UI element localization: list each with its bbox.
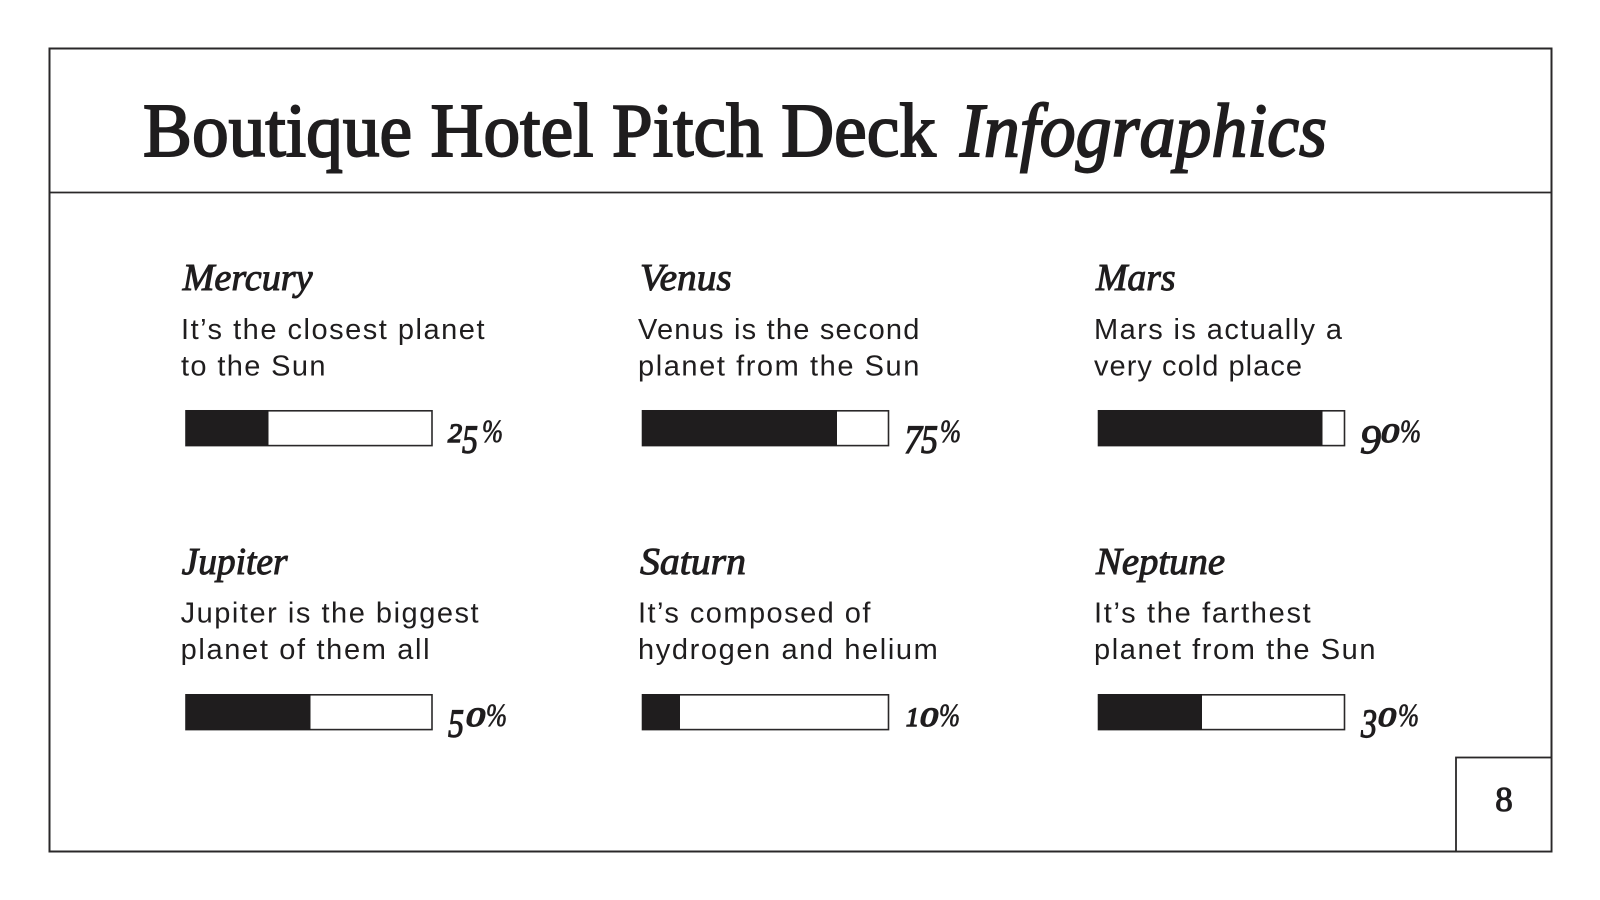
panel: Jupiter: planet of them all [181, 634, 430, 666]
panel: Jupiter: % [486, 698, 507, 734]
panel: Mars: 9 [1360, 417, 1381, 462]
panel: Venus: Venus is the second [638, 314, 919, 346]
panel: Mars [1094, 257, 1421, 462]
panel: Neptune: 0 [1378, 703, 1396, 732]
page number [1456, 758, 1552, 852]
panel: Jupiter: 5 [448, 701, 464, 746]
panel: Neptune: Neptune [1095, 541, 1225, 583]
panel: Mercury: It’s the closest planet [181, 314, 484, 346]
panel: Neptune: 3 [1360, 701, 1377, 746]
panel: Mars: 0 [1381, 419, 1399, 448]
panel: Venus: % [940, 414, 961, 450]
title: Boutique Hotel Pitch Deck [143, 89, 936, 173]
panel: Mercury: to the Sun [181, 350, 326, 382]
title: Infographics [959, 89, 1327, 173]
page number: 8 [1495, 780, 1513, 819]
title [143, 89, 1327, 173]
panel: Saturn: % [939, 698, 960, 734]
panel: Mars: Mars [1095, 257, 1176, 299]
panel: Saturn [638, 541, 960, 734]
panel: Saturn: It’s composed of [638, 598, 871, 630]
panel: Mercury: Mercury [182, 257, 313, 299]
panel: Mars: very cold place [1094, 350, 1302, 382]
panel: Neptune: It’s the farthest [1094, 598, 1311, 630]
panel: Venus: planet from the Sun [638, 350, 919, 382]
panel: Mars: Mars is actually a [1094, 314, 1343, 346]
panel: Jupiter: Jupiter [182, 541, 288, 583]
panel: Mercury: 5 [462, 417, 478, 462]
panel: Mercury: % [482, 414, 503, 450]
panel: Saturn: hydrogen and helium [638, 634, 938, 666]
panel: Jupiter: 0 [466, 703, 485, 732]
panel: Saturn: 1 [906, 703, 919, 732]
panel: Neptune: planet from the Sun [1094, 634, 1376, 666]
panel: Venus: 5 [921, 417, 938, 462]
panel: Jupiter [181, 541, 507, 746]
panel: Neptune [1094, 541, 1419, 746]
panel: Saturn: 0 [920, 703, 938, 732]
panel: Mercury [181, 257, 503, 462]
panel: Venus: Venus [640, 257, 732, 299]
panel: Neptune: % [1398, 698, 1419, 734]
panel: Saturn: Saturn [640, 541, 746, 583]
panel: Mars: % [1400, 414, 1421, 450]
panel: Jupiter: Jupiter is the biggest [181, 598, 479, 630]
panel: Venus: 7 [904, 417, 924, 462]
panel: Venus [638, 257, 961, 462]
panel: Mercury: 2 [448, 419, 462, 448]
